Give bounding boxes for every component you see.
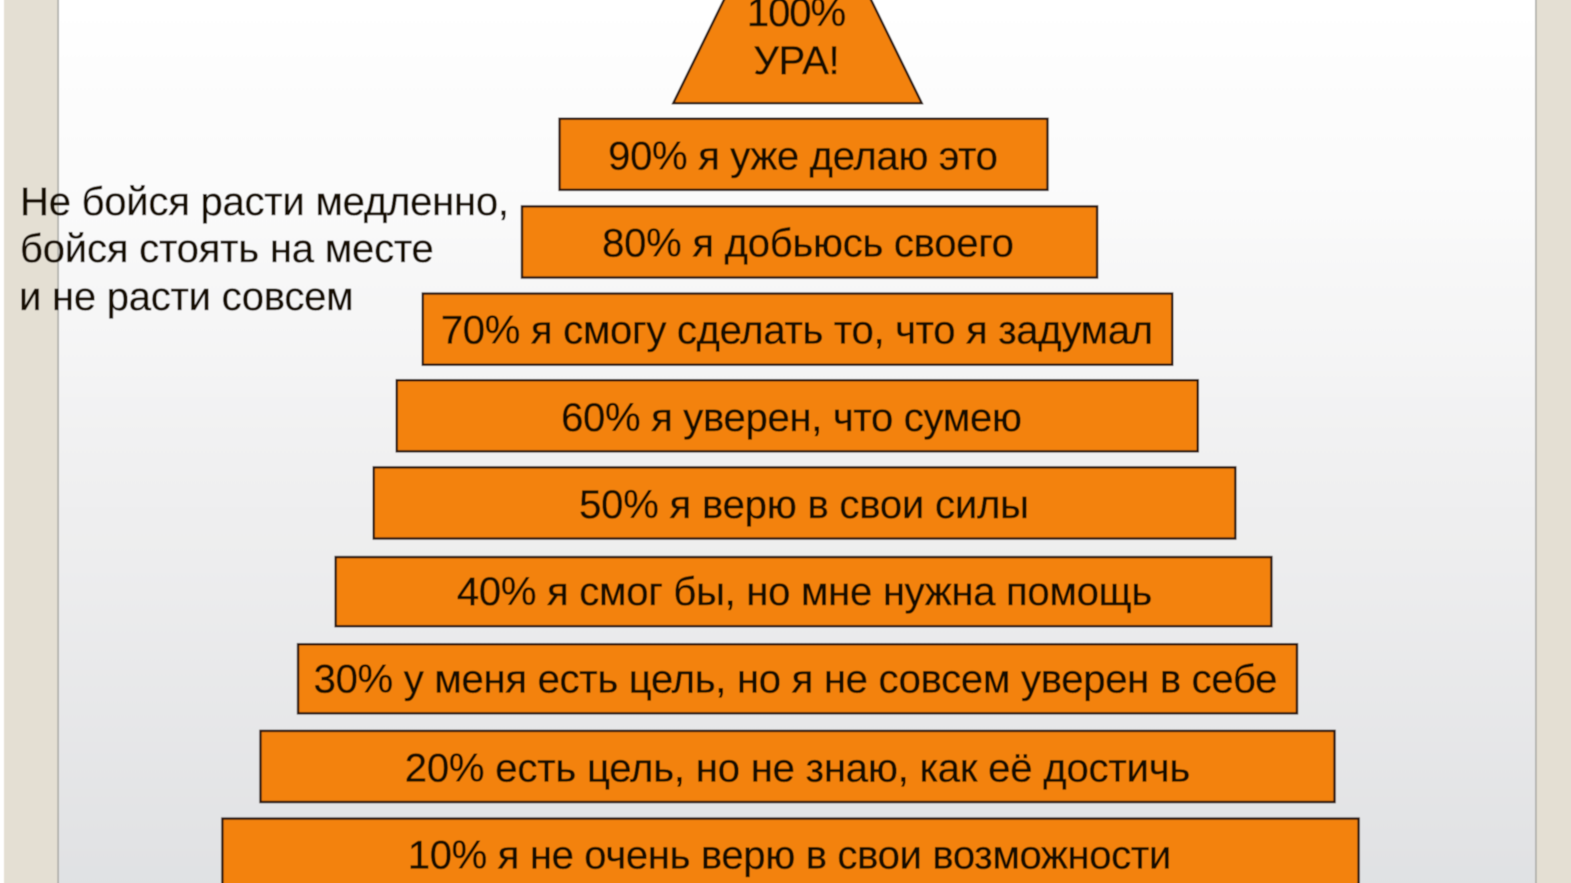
motto text xyxy=(19,180,509,319)
level: 40% xyxy=(336,557,1271,626)
level: 80%: 80% я добьюсь своего xyxy=(602,221,1014,265)
level: 90%: 90% я уже делаю это xyxy=(608,134,998,178)
level: 60% xyxy=(397,380,1198,451)
level: 90% xyxy=(560,119,1047,190)
level: 10%: 10% я не очень верю в свои возможности xyxy=(408,834,1171,878)
level: 70%: 70% я смогу сделать то, что я задумал xyxy=(441,309,1153,353)
level: 20% xyxy=(260,731,1335,802)
level: 60%: 60% я уверен, что сумею xyxy=(561,396,1022,440)
level: 50%: 50% я верю в свои силы xyxy=(579,483,1029,527)
motto text: Не бойся расти медленно, xyxy=(20,180,509,224)
pyramid top: 100% xyxy=(673,0,922,103)
level: 10% xyxy=(222,819,1359,883)
level: 70% xyxy=(423,294,1172,365)
motto text: и не расти совсем xyxy=(19,275,354,319)
level: 40%: 40% я смог бы, но мне нужна помощь xyxy=(457,570,1152,614)
level: 30% xyxy=(298,644,1297,713)
pyramid top: 100%: УРА! xyxy=(753,39,840,83)
level: 20%: 20% есть цель, но не знаю, как её достичь xyxy=(405,746,1190,790)
level: 80% xyxy=(522,206,1097,278)
level: 50% xyxy=(374,467,1235,539)
motto text: бойся стоять на месте xyxy=(20,227,434,271)
level: 30%: 30% у меня есть цель, но я не совсем уверен в себе xyxy=(314,657,1277,701)
